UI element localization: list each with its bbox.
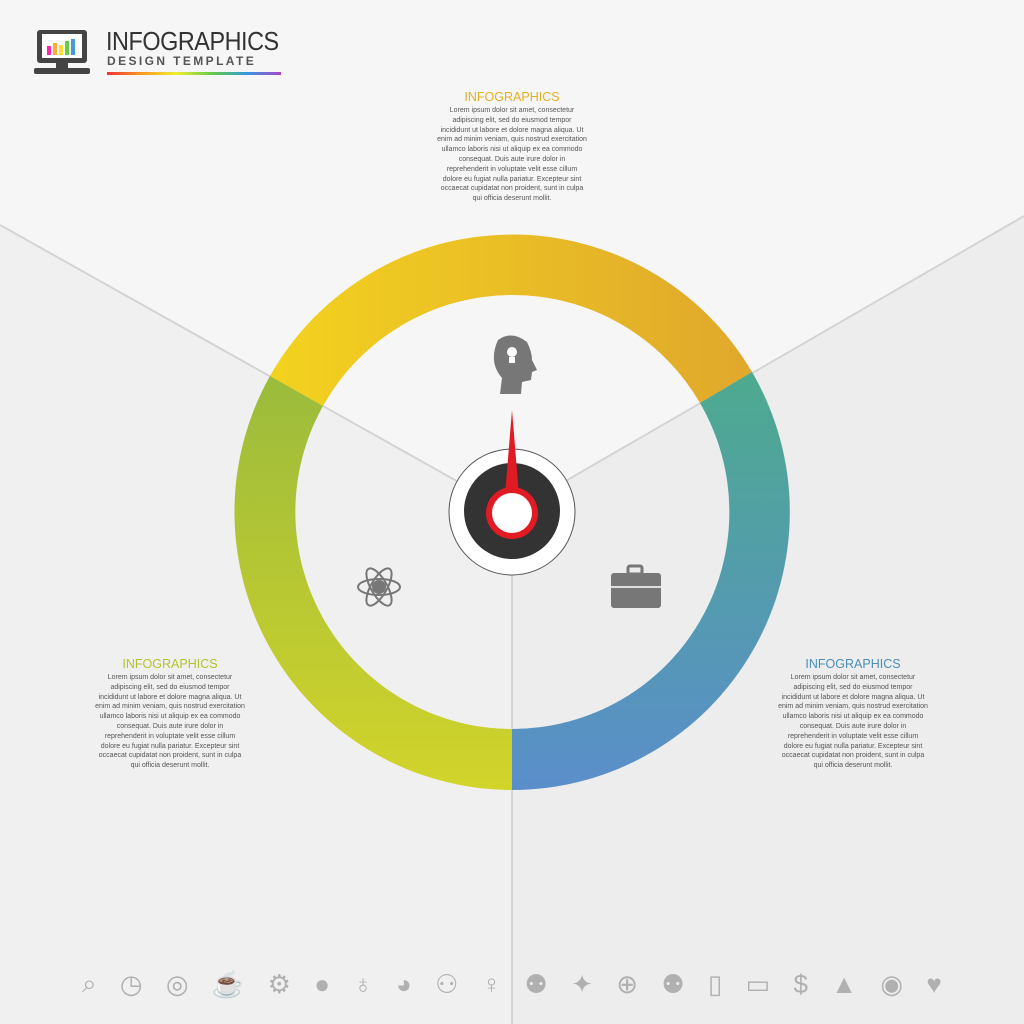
ring: right teal segment [512,372,790,790]
text block: left: INFOGRAPHICS [122,657,218,671]
icon row [82,968,942,998]
text block: top: INFOGRAPHICS [464,90,560,104]
icon row: ♁ [353,968,373,998]
icon: briefcase [611,566,661,608]
title: INFOGRAPHICS [106,26,279,56]
header logo: DESIGN TEMPLATE [107,54,256,68]
icon row: ◉ [880,968,903,998]
icon row: ♀ [482,968,501,998]
text block: left: Lorem ipsum dolor sit amet, consectetur adipiscing elit, sed do eiusmod tempor incididunt ut labore et dolore magna aliqua. Ut enim ad minim veniam, quis nostrud exercitation ullamco laboris nisi ut aliquip ex ea commodo consequat. Duis aute irure dolor in reprehenderit in voluptate velit esse cillum dolore eu fugiat nulla pariatur. Excepteur sint occaecat cupidatat non proident, sunt in culpa qui officia deserunt mollit. [95,674,245,769]
icon: head with bulb [494,335,537,394]
icon row: ▯ [708,968,722,998]
icon row: ⚙ [268,968,291,998]
center dial [449,410,575,575]
icon row: ♥ [926,968,942,998]
icon row: ▭ [746,968,770,998]
icon row: ⚉ [661,968,685,998]
icon row: ✦ [571,968,593,998]
icon row: ⚇ [435,968,458,998]
icon row: ☕ [212,968,244,998]
ring: top yellow segment [270,235,752,406]
text block: right: Lorem ipsum dolor sit amet, consectetur adipiscing elit, sed do eiusmod tempor incididunt ut labore et dolore magna aliqua. Ut enim ad minim veniam, quis nostrud exercitation ullamco laboris nisi ut aliquip ex ea commodo consequat. Duis aute irure dolor in reprehenderit in voluptate velit esse cillum dolore eu fugiat nulla pariatur. Excepteur sint occaecat cupidatat non proident, sunt in culpa qui officia deserunt mollit. [778,674,928,769]
icon row: ◎ [166,968,189,998]
icon: atom [358,565,400,609]
icon row: ▲ [831,968,857,998]
icon row: ⚉ [524,968,548,998]
icon row: ◕ [396,968,412,998]
header logo [34,26,281,75]
icon row: ● [314,968,330,998]
ring: left green segment [234,376,512,790]
icon row: $ [793,968,808,998]
icon row: ⌕ [82,968,97,998]
text block: top: Lorem ipsum dolor sit amet, consectetur adipiscing elit, sed do eiusmod tempor incididunt ut labore et dolore magna aliqua. Ut enim ad minim veniam, quis nostrud exercitation ullamco laboris nisi ut aliquip ex ea commodo consequat. Duis aute irure dolor in reprehenderit in voluptate velit esse cillum dolore eu fugiat nulla pariatur. Excepteur sint occaecat cupidatat non proident, sunt in culpa qui officia deserunt mollit. [437,107,587,202]
text block: right: INFOGRAPHICS [805,657,901,671]
icon row: ◷ [120,968,143,998]
icon row: ⊕ [616,968,638,998]
icon: monitor [34,30,90,74]
